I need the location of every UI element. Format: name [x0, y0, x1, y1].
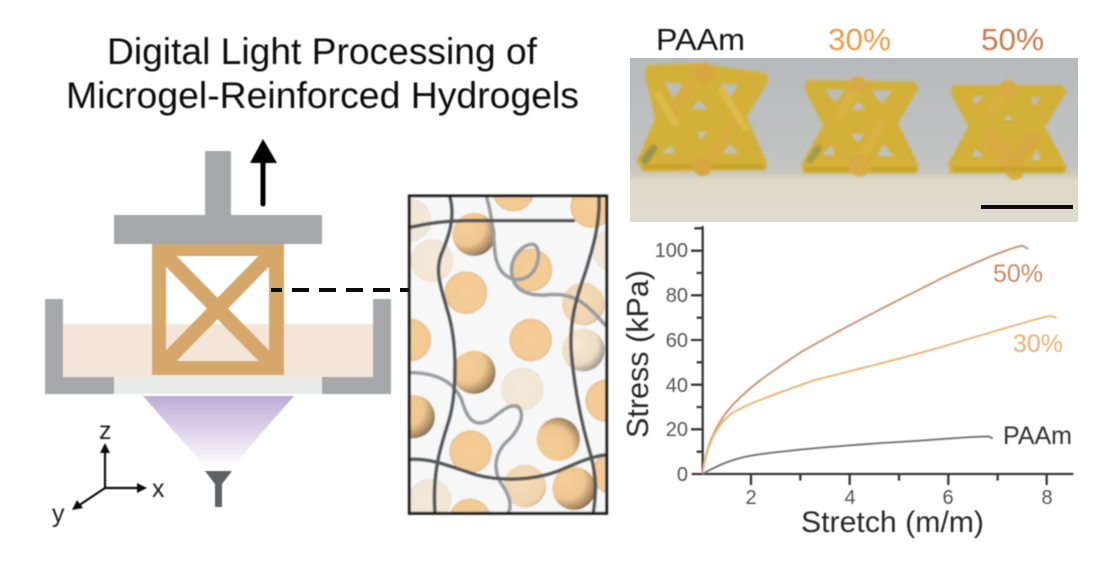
tick labels: 80: [666, 285, 688, 307]
panel: photograph of printed lattices: [630, 58, 1078, 222]
axis titles: [621, 270, 984, 539]
lattice: 30%: [802, 76, 918, 176]
curve labels: PAAm: [1003, 422, 1072, 450]
panel: photo labels: [656, 22, 1044, 57]
axes: xyz coordinate triad: z: [99, 417, 112, 445]
axes: xyz coordinate triad: x: [152, 475, 165, 503]
lattice: 50%: [948, 80, 1067, 173]
panel: photo labels: PAAm: [656, 22, 745, 57]
axis titles: Stress (kPa): [621, 270, 655, 438]
curve: 50%: [703, 246, 1028, 473]
tick labels: 0: [677, 464, 688, 486]
tick labels: [655, 240, 1053, 509]
panel: DLP printer schematic: [45, 139, 391, 528]
microgel particles: [410, 196, 606, 514]
axes: xyz coordinate triad: y: [52, 500, 65, 528]
tick labels: 60: [666, 330, 688, 352]
panel: photo labels: 30%: [828, 22, 891, 57]
dashed connector: [271, 288, 409, 292]
axes: xyz coordinate triad: [52, 417, 165, 528]
panel: photo labels: 50%: [981, 22, 1044, 57]
tick labels: 2: [745, 487, 757, 509]
tick labels: 20: [666, 419, 688, 441]
polymer chains: [410, 197, 605, 513]
title: Microgel-Reinforced Hydrogels: [66, 75, 579, 116]
tick labels: 6: [942, 487, 954, 509]
tick labels: 8: [1041, 487, 1053, 509]
tick labels: 100: [655, 240, 688, 262]
resin bath: [63, 324, 373, 377]
axis titles: Stretch (m/m): [801, 506, 984, 539]
printed lattice: [152, 244, 284, 375]
title: [66, 31, 579, 116]
vat window: [114, 377, 322, 394]
curve labels: [993, 260, 1072, 450]
tick labels: 40: [666, 375, 688, 397]
panel border: [409, 196, 607, 513]
curve labels: 30%: [1013, 330, 1063, 358]
arrow: upward motion: [250, 139, 277, 204]
panel: microgel network detail: [406, 193, 610, 516]
curve: PAAm: [703, 436, 993, 474]
projector: [205, 471, 232, 507]
curve labels: 50%: [993, 260, 1043, 288]
build platform: [114, 151, 322, 244]
title: Digital Light Processing of: [107, 31, 538, 72]
tick labels: 4: [844, 487, 856, 509]
axes and ticks: [691, 226, 1073, 485]
lattice: PAAm: [637, 63, 768, 176]
vat: [45, 299, 391, 394]
scale bar: [981, 205, 1073, 209]
light beam: [143, 396, 294, 468]
chart: stress vs stretch: [621, 226, 1073, 539]
curve: 30%: [703, 316, 1057, 473]
